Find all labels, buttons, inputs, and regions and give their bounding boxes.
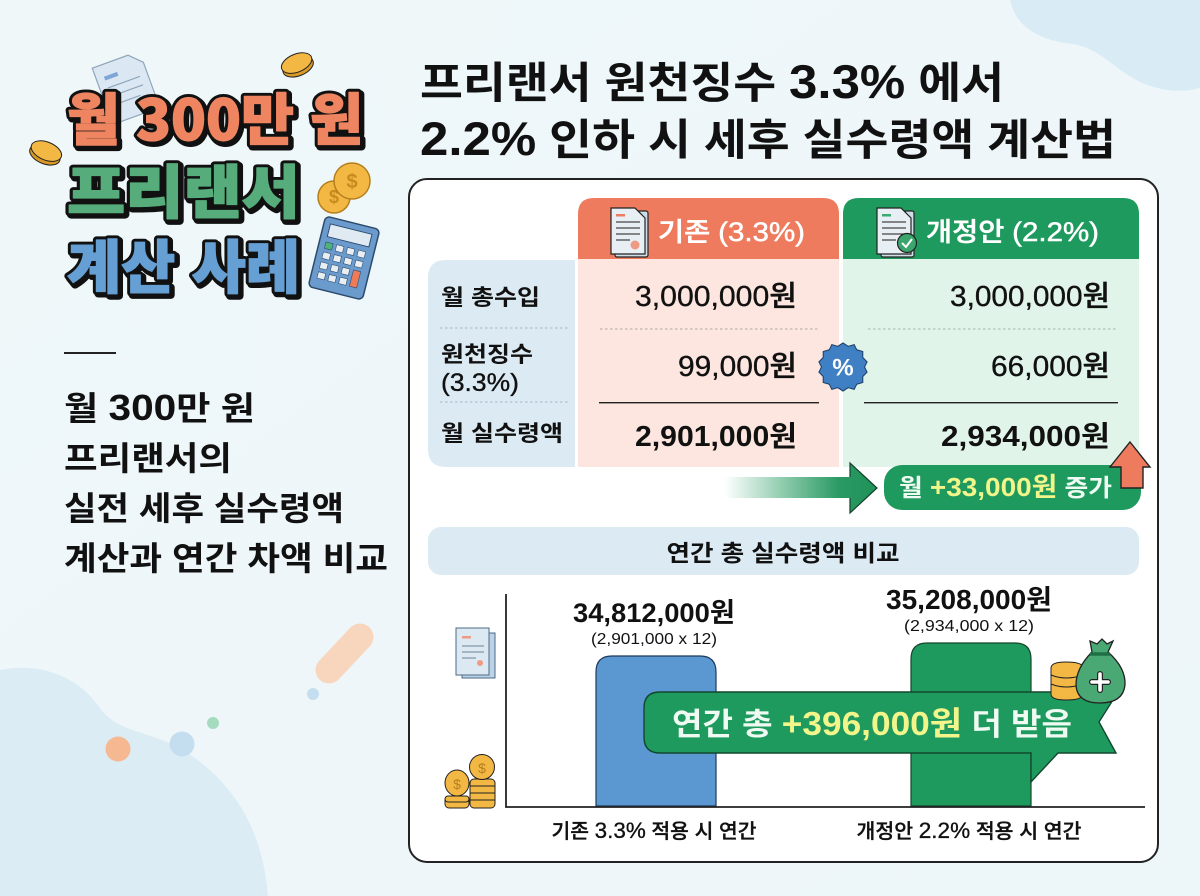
column header: existing: [578, 198, 839, 259]
value: revised: (2,934,000 x 12): [904, 618, 1034, 635]
table row labels: 월 실수령액: [441, 421, 563, 446]
table row labels: (3.3%): [441, 369, 519, 397]
column: existing 3.3%: 3,000,000원: [635, 280, 797, 313]
subtitle text block: 계산과 연간 차액 비교: [64, 540, 388, 577]
callout: monthly increase: [884, 465, 1141, 510]
divider: [64, 352, 116, 354]
column: revised 2.2%: 66,000원: [991, 350, 1110, 383]
subtitle text block: 실전 세후 실수령액: [64, 490, 344, 527]
table row labels: 월 총수입: [441, 285, 540, 310]
icon: coin left: [27, 137, 65, 169]
subtitle text block: [64, 387, 388, 577]
panel: comparison card: [409, 179, 1158, 862]
background blob: bottom left: [0, 668, 268, 896]
icon: coin stacks left: [445, 754, 495, 808]
column: existing 3.3%: [578, 198, 839, 467]
column: revised 2.2%: 2,934,000원: [941, 421, 1110, 453]
main heading: 2.2% 인하 시 세후 실수령액 계산법: [420, 112, 1116, 165]
icon: dollar coins: $: [346, 171, 358, 193]
column header: revised: [843, 198, 1139, 259]
title: 월 300만 원: 월 300만 원: [67, 76, 363, 157]
header text: existing: 기존 (3.3%): [658, 217, 805, 247]
title: 계산 사례: 계산 사례: [67, 221, 300, 305]
table row labels: [428, 260, 575, 467]
title: 계산 사례: 계산 사례: [69, 223, 302, 307]
column: revised 2.2%: 3,000,000원: [950, 280, 1110, 313]
icon: coin stacks left: $: [453, 776, 461, 792]
background blob: top right: [1010, 0, 1200, 91]
value: existing: 34,812,000원: [573, 598, 735, 628]
arrow head outline: [850, 463, 877, 513]
table row labels: 원천징수: [441, 342, 533, 367]
icon: coin top: [278, 49, 316, 81]
decorative shapes: [106, 637, 360, 762]
icon: dollar coins: $: [329, 187, 339, 207]
title: 프리랜서: 프리랜서: [67, 146, 300, 230]
section heading bar: [428, 527, 1139, 575]
subtitle text block: 월 300만 원: [64, 387, 255, 428]
title: 월 300만 원: 월 300만 원: [69, 78, 365, 159]
value: revised: 35,208,000원: [886, 584, 1052, 615]
bar chart: [506, 584, 1145, 843]
subtitle text block: 프리랜서의: [64, 440, 232, 477]
icon: floating document: [92, 51, 160, 125]
icon: percent badge: %: [832, 355, 854, 382]
bar: existing: [596, 656, 716, 806]
callout banner: annual increase: [644, 692, 1118, 782]
axis label: revised: 개정안 2.2% 적용 시 연간: [856, 818, 1082, 843]
icon: documents left: [456, 628, 495, 678]
title: 프리랜서: 프리랜서: [67, 146, 300, 230]
column: revised 2.2%: [843, 198, 1139, 467]
value: existing: (2,901,000 x 12): [591, 631, 717, 648]
main heading: 프리랜서 원천징수 3.3% 에서: [420, 55, 1004, 108]
section heading bar: 연간 총 실수령액 비교: [666, 540, 900, 566]
axis label: existing: 기존 3.3% 적용 시 연간: [552, 818, 756, 843]
icon: dollar coins: [318, 163, 370, 213]
icon: money bag with coins: [1051, 639, 1125, 703]
icon: coin stacks left: $: [478, 760, 486, 776]
column: existing 3.3%: 99,000원: [678, 350, 797, 383]
callout banner: annual increase: 연간 총 +396,000원 더 받음: [672, 705, 1072, 742]
icon: red up arrow: [1110, 442, 1150, 488]
icon: calculator: [308, 216, 380, 300]
title: 월 300만 원: 월 300만 원: [67, 76, 363, 157]
bar: revised: [911, 643, 1031, 806]
column: existing 3.3%: 2,901,000원: [635, 421, 797, 453]
icon: document red: [611, 208, 648, 257]
arrow: green gradient: [725, 463, 877, 513]
main heading: [420, 55, 1116, 165]
header text: revised: 개정안 (2.2%): [926, 217, 1099, 247]
value: existing: [573, 598, 735, 648]
value: revised: [886, 584, 1052, 635]
title: 프리랜서: 프리랜서: [69, 148, 302, 232]
callout: monthly increase: 월 +33,000원 증가: [899, 472, 1112, 502]
icon: document check: [877, 208, 916, 257]
axes: [506, 594, 1145, 807]
title: 계산 사례: 계산 사례: [67, 221, 300, 305]
icon: percent badge: [819, 343, 867, 391]
